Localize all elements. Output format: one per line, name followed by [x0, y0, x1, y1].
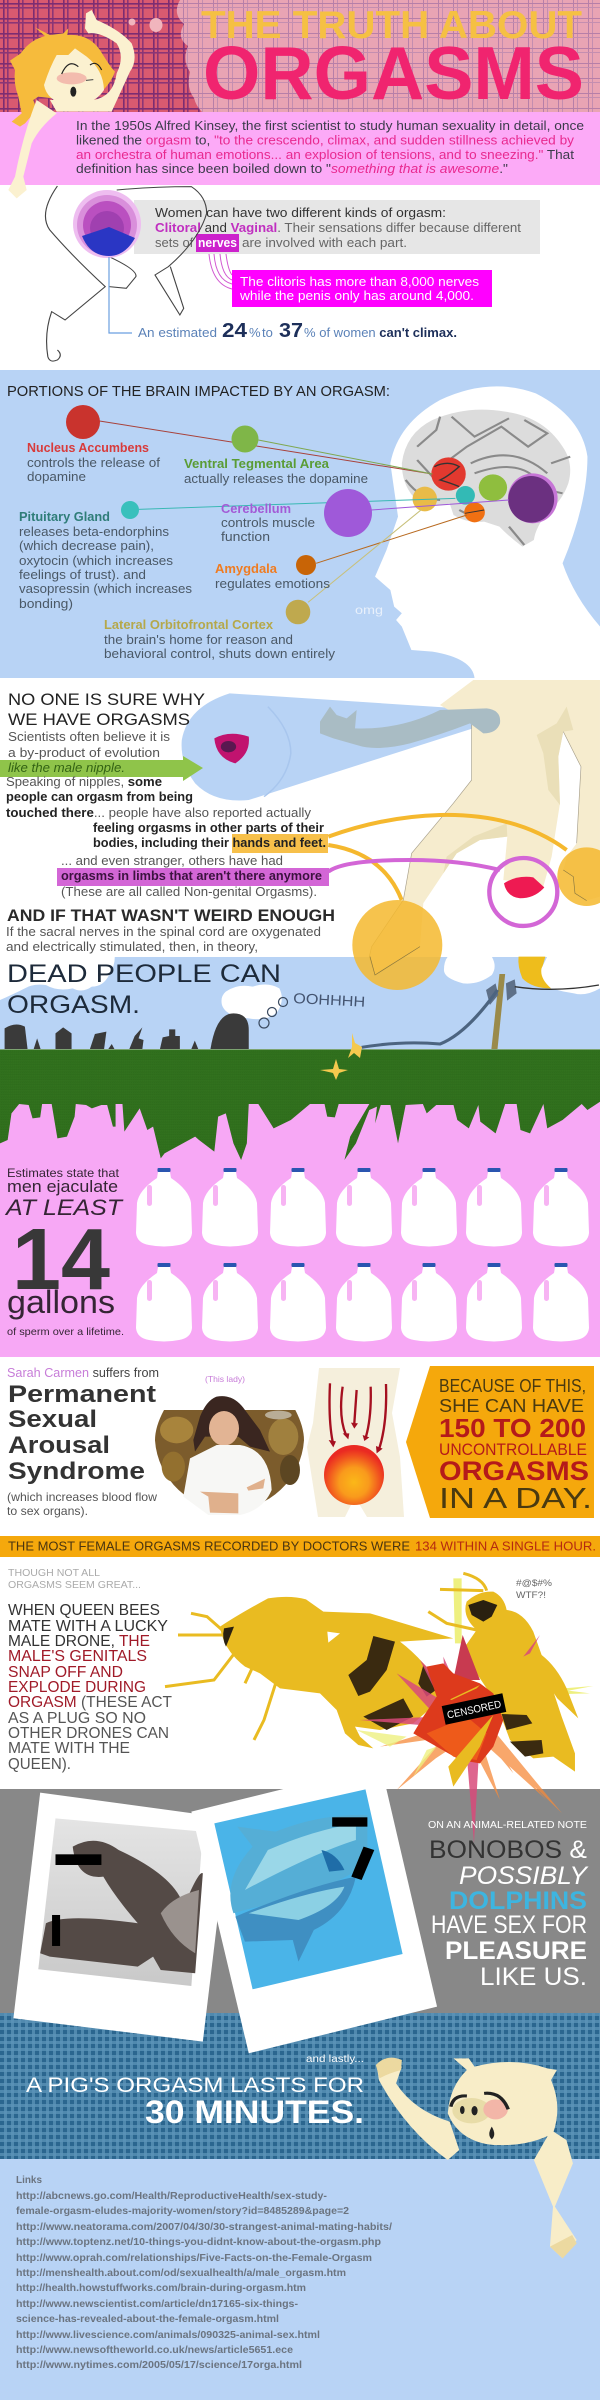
stat: women who cannot climax: % of women can't climax.: [304, 325, 457, 340]
text: non-genital orgasms: Speaking of nipples, some: [6, 774, 162, 789]
stat: women who cannot climax: to: [262, 325, 273, 340]
thought bubble: OOHHHH: [293, 991, 366, 1011]
header plaid background: [0, 0, 600, 112]
text: queen bees: MALE DRONE, THE: [8, 1633, 150, 1650]
text: non-genital orgasms: (These are all called Non-genital Orgasms).: [61, 884, 317, 899]
stat: women who cannot climax: An estimated: [138, 325, 217, 340]
text: permanent sexual arousal syndrome: Permanent: [8, 1381, 156, 1408]
source links: http://www.toptenz.net/10-things-you-didnt-know-about-the-orgasm.php: [16, 2236, 381, 2248]
stat: women who cannot climax: %: [249, 325, 261, 340]
label: orbitofrontal cortex: [104, 617, 336, 661]
arrow: like the male nipple: like the male nipple.: [8, 760, 125, 775]
label: amygdala: regulates emotions: [215, 576, 331, 591]
panel: grey animal section: [0, 1789, 600, 2013]
label: pituitary gland: [19, 509, 193, 611]
text: weird enough: AND IF THAT WASN'T WEIRD ENOUGH: [7, 906, 335, 925]
pictogram: 14 milk jugs: [136, 1168, 589, 1342]
source links: female-orgasm-eludes-majority-women/story?id=8485289&page=2: [16, 2205, 349, 2217]
stat: women who cannot climax: 24: [222, 320, 248, 342]
callout: 150 to 200: IN A DAY.: [439, 1483, 592, 1515]
intro band: [0, 112, 600, 185]
gravestones: [5, 1013, 249, 1049]
brain circle: orbitofrontal: [286, 600, 310, 624]
callout: 150 to 200: 150 TO 200: [439, 1413, 586, 1443]
heading: dead people: ORGASM.: [7, 991, 140, 1019]
fact: kinds of orgasm: sets of: [155, 235, 194, 250]
source links: http://abcnews.go.com/Health/ReproductiveHealth/sex-study-: [16, 2190, 327, 2202]
label: ventral tegmental area: Ventral Tegmental Area: [184, 456, 330, 471]
source links: http://www.newscientist.com/article/dn17165-six-things-: [16, 2298, 299, 2310]
stat: gallons text: AT LEAST: [4, 1195, 124, 1220]
fact: kinds of orgasm: [134, 200, 540, 254]
label: pituitary gland: feelings of trust). and: [19, 567, 146, 582]
icon: concentric circle: [73, 190, 141, 258]
text: permanent sexual arousal syndrome: Arousal: [8, 1432, 110, 1459]
text: bonobos and dolphins: ON AN ANIMAL-RELATED NOTE: [428, 1820, 587, 1831]
fact: kinds of orgasm: Women can have two different kinds of orgasm:: [155, 205, 446, 220]
fact: kinds of orgasm: nerves: [198, 235, 237, 250]
panel: brain: [0, 370, 600, 678]
stat: gallons text: [4, 1166, 124, 1338]
text: bonobos and dolphins: POSSIBLY: [459, 1862, 589, 1890]
text: non-genital orgasms: [6, 774, 329, 899]
arrow: like the male nipple: [0, 756, 203, 781]
photo: dolphins: [191, 1765, 437, 2053]
sky and clouds: [0, 957, 600, 1049]
intro band: an orchestra of human emotions... an explosion of tensions, and to sneezing." That: [76, 147, 574, 162]
text: permanent sexual arousal syndrome: to sex organs).: [7, 1504, 88, 1518]
illustration: beige figure: [369, 680, 600, 975]
grass: [0, 1049, 600, 1160]
label: bee swearing: [516, 1578, 553, 1601]
callout: nerves count: while the penis only has around 4,000.: [239, 288, 474, 303]
text: no one is sure why: WE HAVE ORGASMS: [8, 710, 190, 729]
text: queen bees: THOUGH NOT ALL: [8, 1567, 100, 1579]
fact: kinds of orgasm: are involved with each part.: [242, 235, 407, 250]
text: non-genital orgasms: people can orgasm from being: [6, 789, 193, 804]
stat: gallons text: 14: [12, 1211, 110, 1308]
label: nucleus accumbens: dopamine: [27, 469, 86, 484]
text: permanent sexual arousal syndrome: Sexual: [8, 1406, 97, 1433]
source links: science-has-revealed-about-the-female-orgasm.html: [16, 2313, 279, 2325]
callout: 150 to 200: UNCONTROLLABLE: [439, 1440, 587, 1459]
stat: gallons text: Estimates state that: [7, 1166, 120, 1180]
source links: http://menshealth.about.com/od/sexualhealth/a/male_orgasm.htm: [16, 2267, 346, 2279]
text: pig fact: 30 MINUTES.: [145, 2094, 364, 2130]
label: nucleus accumbens: Nucleus Accumbens: [27, 440, 149, 455]
source links: http://www.nytimes.com/2005/05/17/science/17orga.html: [16, 2359, 302, 2371]
brain diagram: [402, 410, 570, 547]
brain circle: pituitary: [121, 501, 139, 519]
label: bee swearing: WTF?!: [516, 1590, 546, 1601]
text: no one is sure why: [8, 690, 205, 760]
label: pituitary gland: oxytocin (which increases: [19, 553, 174, 568]
text: non-genital orgasms: feeling orgasms in other parts of their: [93, 820, 324, 835]
heading: dead people: DEAD PEOPLE CAN: [7, 960, 281, 988]
icon: sparks: [320, 1033, 362, 1080]
callout: 150 to 200: ORGASMS: [439, 1456, 589, 1486]
intro band: likened the orgasm to, "to the crescendo, climax, and sudden stillness achieved by: [76, 132, 575, 148]
callout: nerves count: [209, 254, 492, 307]
telephone pole and wire: [362, 974, 599, 1049]
text: non-genital orgasms: orgasms in limbs that aren't there anymore: [61, 868, 322, 883]
text: non-genital orgasms: touched there... people have also reported actually: [6, 805, 312, 820]
body outline: [45, 186, 207, 361]
text: queen bees: MATE WITH A LUCKY: [8, 1618, 168, 1635]
source links: [16, 2174, 392, 2371]
character: header figure: [8, 10, 135, 198]
text: permanent sexual arousal syndrome: Sarah Carmen suffers from: [7, 1366, 159, 1380]
text: weird enough: [6, 906, 335, 954]
photo: bonobos: [13, 1793, 230, 2042]
photo: woman portrait: [155, 1396, 304, 1515]
text: bonobos and dolphins: [428, 1820, 589, 1991]
label: pituitary gland: Pituitary Gland: [19, 509, 110, 524]
illustration: grey arm: [320, 707, 500, 748]
text: permanent sexual arousal syndrome: (which increases blood flow: [7, 1490, 157, 1504]
stat: gallons text: of sperm over a lifetime.: [7, 1326, 124, 1338]
character: pig: [376, 2058, 577, 2258]
stat: gallons text: gallons: [7, 1284, 115, 1320]
text: bonobos and dolphins: PLEASURE: [445, 1937, 587, 1965]
callout: 150 to 200: [406, 1366, 594, 1518]
illustration: magnified spot cone: [182, 693, 478, 800]
text: queen bees: QUEEN).: [8, 1756, 71, 1773]
text: non-genital orgasms: ... and even stranger, others have had: [61, 853, 283, 868]
label: nucleus accumbens: controls the release of: [27, 455, 160, 470]
text: permanent sexual arousal syndrome: Syndrome: [8, 1458, 145, 1485]
text: weird enough: and electrically stimulated, then, in theory,: [6, 939, 258, 954]
source links: Links: [16, 2174, 42, 2186]
text: pig fact: [26, 2054, 364, 2130]
label: cerebellum: controls muscle: [221, 515, 315, 530]
label: cerebellum: Cerebellum: [221, 501, 291, 516]
connectors and limb circles: [328, 815, 600, 990]
callout: nerves count: The clitoris has more than 8,000 nerves: [240, 274, 480, 289]
label: this lady: (This lady): [205, 1374, 245, 1384]
label: cerebellum: [221, 501, 315, 544]
illustration: lower body with circle: [307, 1368, 404, 1517]
text: queen bees: OTHER DRONES CAN: [8, 1725, 169, 1742]
label: orbitofrontal cortex: the brain's home for reason and: [104, 632, 293, 647]
heading: brain: PORTIONS OF THE BRAIN IMPACTED BY AN ORGASM:: [7, 383, 390, 400]
label: pituitary gland: (which decrease pain),: [19, 538, 154, 553]
label: pituitary gland: vasopressin (which increases: [19, 581, 193, 596]
illustration: explosion: [357, 1635, 562, 1843]
text: queen bees: MALE'S GENITALS: [8, 1648, 147, 1665]
text: no one is sure why: Scientists often believe it is: [8, 729, 171, 744]
head silhouette: [375, 386, 600, 678]
connector lines: [100, 421, 509, 602]
brain circle: amygdala: [296, 555, 316, 575]
illustration: bees: [165, 1573, 593, 1772]
text: bonobos and dolphins: DOLPHINS: [449, 1887, 587, 1915]
intro band: definition has since been boiled down to " something that is awesome .": [76, 161, 508, 176]
text: weird enough: If the sacral nerves in the spinal cord are oxygenated: [6, 924, 321, 939]
label: ventral tegmental area: [184, 456, 368, 486]
brain circle: nucleus accumbens: [66, 405, 100, 439]
callout: 150 to 200: SHE CAN HAVE: [439, 1396, 584, 1416]
label: ventral tegmental area: actually releases the dopamine: [184, 471, 368, 486]
panel: pink gallons background: [0, 1090, 600, 1357]
fact: kinds of orgasm: Clitoral and Vaginal. Their sensations differ because different: [155, 220, 521, 235]
text: pig fact: and lastly...: [306, 2054, 364, 2065]
brain circle: cerebellum: [324, 489, 372, 537]
label: orbitofrontal cortex: Lateral Orbitofrontal Cortex: [104, 617, 274, 632]
text: queen bees: WHEN QUEEN BEES: [8, 1602, 160, 1619]
text: non-genital orgasms: bodies, including their hands and feet.: [93, 835, 326, 850]
text: permanent sexual arousal syndrome: [7, 1366, 159, 1518]
text: queen bees: SNAP OFF AND: [8, 1664, 123, 1681]
label: pituitary gland: bonding): [19, 596, 73, 611]
text: pig fact: A PIG'S ORGASM LASTS FOR: [26, 2074, 364, 2097]
label: bee swearing: #@$#%: [516, 1578, 553, 1589]
text: no one is sure why: NO ONE IS SURE WHY: [8, 690, 205, 709]
text: queen bees: AS A PLUG SO NO: [8, 1710, 146, 1727]
label: amygdala: Amygdala: [215, 561, 278, 576]
text: queen bees: EXPLODE DURING: [8, 1679, 146, 1696]
text: queen bees: MATE WITH THE: [8, 1740, 130, 1757]
stat: women who cannot climax: 37: [279, 320, 303, 342]
source links: http://www.neatorama.com/2007/04/30/30-strangest-animal-mating-habits/: [16, 2221, 392, 2233]
text: no one is sure why: a by-product of evolution: [8, 745, 160, 760]
source links: http://health.howstuffworks.com/brain-during-orgasm.htm: [16, 2282, 306, 2294]
text: bonobos and dolphins: BONOBOS &: [429, 1836, 587, 1864]
text: bonobos and dolphins: LIKE US.: [480, 1963, 587, 1991]
title: THE TRUTH ABOUT: [201, 4, 582, 47]
thought bubble: [259, 991, 366, 1028]
source links: http://www.oprah.com/relationships/Five-Facts-on-the-Female-Orgasm: [16, 2252, 372, 2264]
censored bar: CENSORED: [446, 1698, 503, 1722]
label: cerebellum: function: [221, 529, 270, 544]
heading: dead people: [7, 960, 281, 1019]
label: amygdala: [215, 561, 331, 591]
stat: women who cannot climax: [109, 257, 457, 342]
text: queen bees: ORGASMS SEEM GREAT...: [8, 1579, 141, 1591]
source links: http://www.livescience.com/animals/090325-animal-sex.html: [16, 2329, 320, 2341]
banner: most female orgasms: 134 WITHIN A SINGLE HOUR.: [415, 1538, 596, 1554]
panel: links background: [0, 2159, 600, 2400]
stat: gallons text: men ejaculate: [7, 1178, 118, 1196]
plaid band: pig fact: [0, 2013, 600, 2159]
intro band: In the 1950s Alfred Kinsey, the first scientist to study human sexuality in detail, once: [76, 118, 584, 133]
label: pituitary gland: releases beta-endorphins: [19, 524, 169, 539]
brain circle: ventral tegmental: [232, 426, 258, 452]
text: queen bees: [8, 1567, 173, 1773]
banner: most female orgasms: THE MOST FEMALE ORGASMS RECORDED BY DOCTORS WERE: [8, 1538, 410, 1554]
label: nucleus accumbens: [27, 440, 160, 484]
text: queen bees: ORGASM (THESE ACT: [8, 1694, 173, 1711]
label: orbitofrontal cortex: behavioral control, shuts down entirely: [104, 646, 336, 661]
title: ORGASMS: [203, 31, 584, 115]
source links: http://www.newsoftheworld.co.uk/news/article5651.ece: [16, 2344, 293, 2356]
label: omg: omg: [355, 603, 383, 617]
banner: most female orgasms: [0, 1536, 600, 1557]
